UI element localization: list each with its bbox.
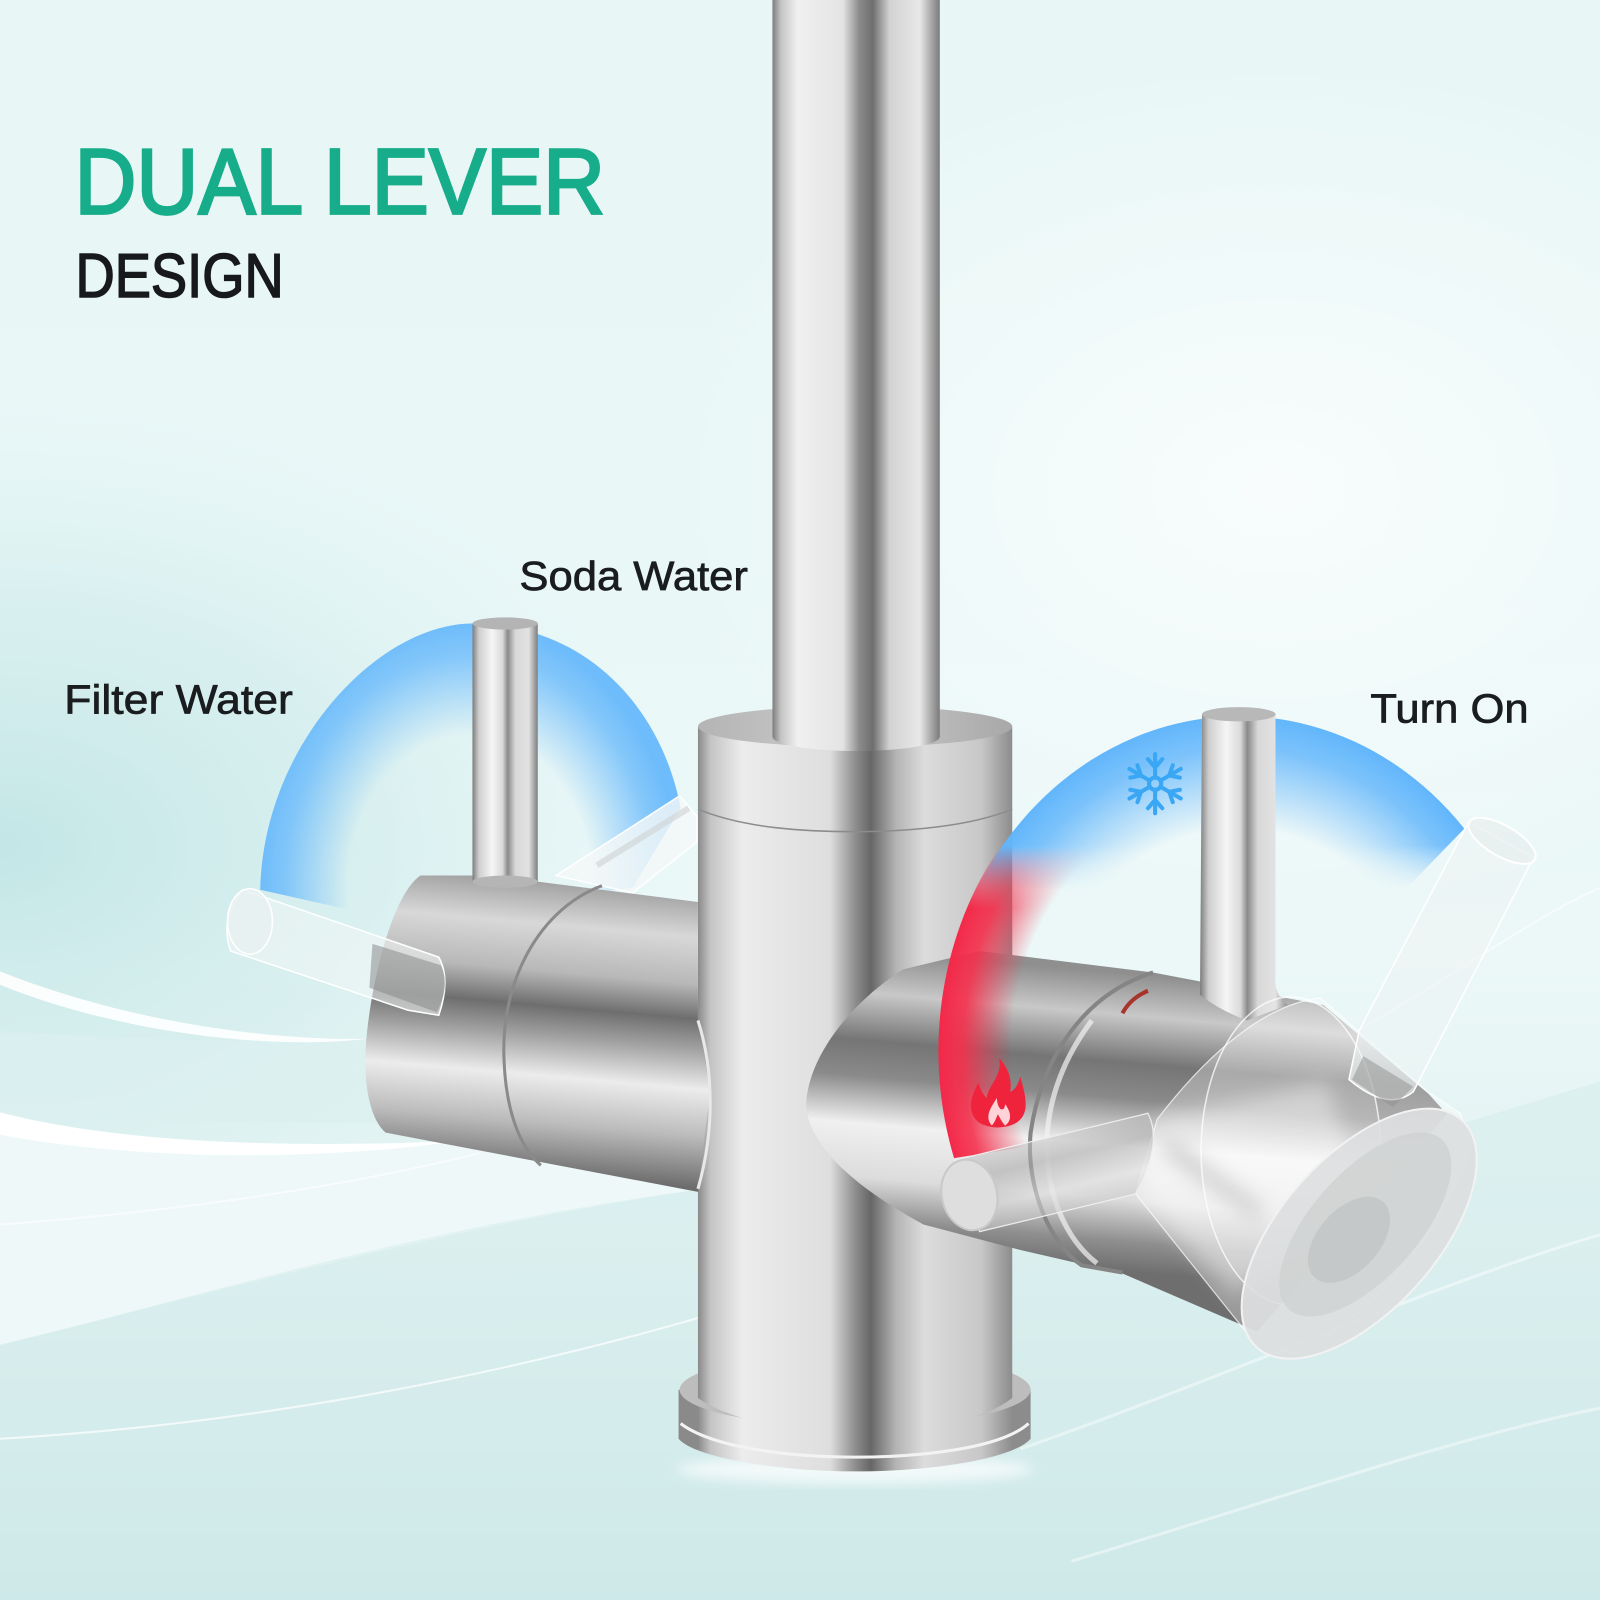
- aerator: [1292, 1181, 1406, 1298]
- arc: right lever range hot: [938, 850, 1072, 1158]
- cone shadow streak: [1163, 1143, 1260, 1214]
- ghost faucet head: [1136, 997, 1519, 1399]
- right lever: upright handle: [1200, 707, 1288, 1020]
- ghost lever: filter water position: [227, 889, 445, 1015]
- cone highlight: [1143, 1082, 1367, 1296]
- red mark on arm: [1122, 991, 1148, 1013]
- ghost lever: turn on position: [1349, 809, 1542, 1107]
- icon: snowflake: [1126, 754, 1184, 813]
- faucet base shadow: [677, 1455, 1034, 1484]
- ghost lever: soda water position: [556, 796, 697, 893]
- icon: flame: [971, 1058, 1026, 1128]
- subheading: design: DESIGN: [76, 242, 284, 311]
- left valve arm: [365, 876, 710, 1192]
- arc: left lever range: [260, 623, 681, 918]
- right valve arm and outlet metal: [806, 951, 1447, 1332]
- outlet face: [1199, 1068, 1519, 1399]
- heading: dual lever: DUAL LEVER: [74, 129, 605, 233]
- outlet inner face: [1249, 1104, 1481, 1345]
- faucet body column: [698, 706, 1012, 1431]
- faucet base: [679, 1353, 1031, 1471]
- label: turn on: Turn On: [1370, 685, 1529, 731]
- faucet riser pipe: [772, 0, 940, 751]
- ghost lever: hot position: [934, 1113, 1153, 1236]
- arc: right lever range cold: [980, 718, 1464, 885]
- label: filter water: Filter Water: [64, 676, 293, 722]
- left lever: upright handle: [472, 617, 538, 888]
- label: soda water: Soda Water: [519, 553, 748, 599]
- ghost body outline: [1201, 997, 1381, 1305]
